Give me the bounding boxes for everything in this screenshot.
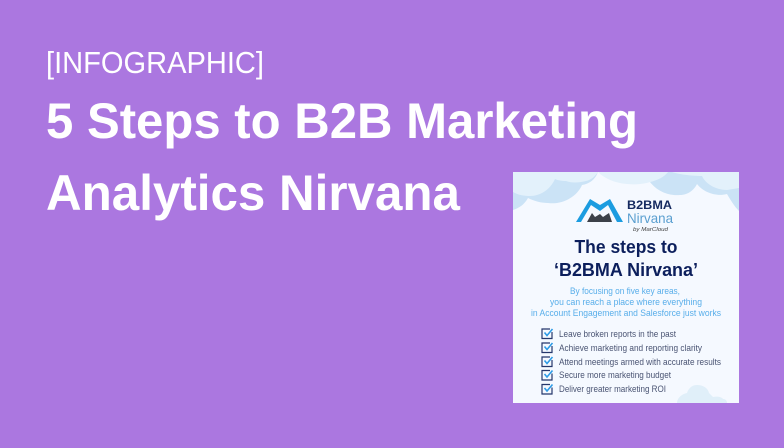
- clouds at top of card: [513, 172, 739, 211]
- card intro text: [531, 286, 721, 319]
- card intro text: in Account Engagement and Salesforce just works: [531, 308, 721, 319]
- logo wordmark: [627, 198, 673, 233]
- logo wordmark: by MarCloud: [633, 227, 669, 233]
- card intro text: By focusing on five key areas,: [570, 286, 680, 297]
- item: leave broken reports: Leave broken reports in the past: [559, 329, 676, 340]
- item: deliver ROI: Deliver greater marketing ROI: [559, 384, 666, 395]
- cloud at bottom of card: [677, 385, 727, 403]
- logo mark: mountains: [576, 199, 623, 222]
- main heading: [46, 93, 638, 221]
- card heading: [554, 236, 698, 280]
- item: attend meetings: Attend meetings armed with accurate results: [559, 357, 721, 368]
- main heading: 5 Steps to B2B Marketing: [46, 93, 638, 149]
- card heading: The steps to: [574, 236, 678, 257]
- item: achieve clarity: Achieve marketing and reporting clarity: [559, 343, 702, 354]
- logo wordmark: B2BMA: [627, 198, 672, 212]
- card heading: ‘B2BMA Nirvana’: [554, 259, 698, 280]
- item: secure budget: Secure more marketing budget: [559, 370, 671, 381]
- main heading: Analytics Nirvana: [46, 165, 461, 221]
- logo wordmark: Nirvana: [627, 210, 673, 226]
- eyebrow label: [INFOGRAPHIC]: [46, 45, 264, 80]
- card intro text: you can reach a place where everything: [550, 297, 702, 308]
- checklist: [542, 329, 721, 395]
- panel: infographic preview card: [513, 172, 739, 403]
